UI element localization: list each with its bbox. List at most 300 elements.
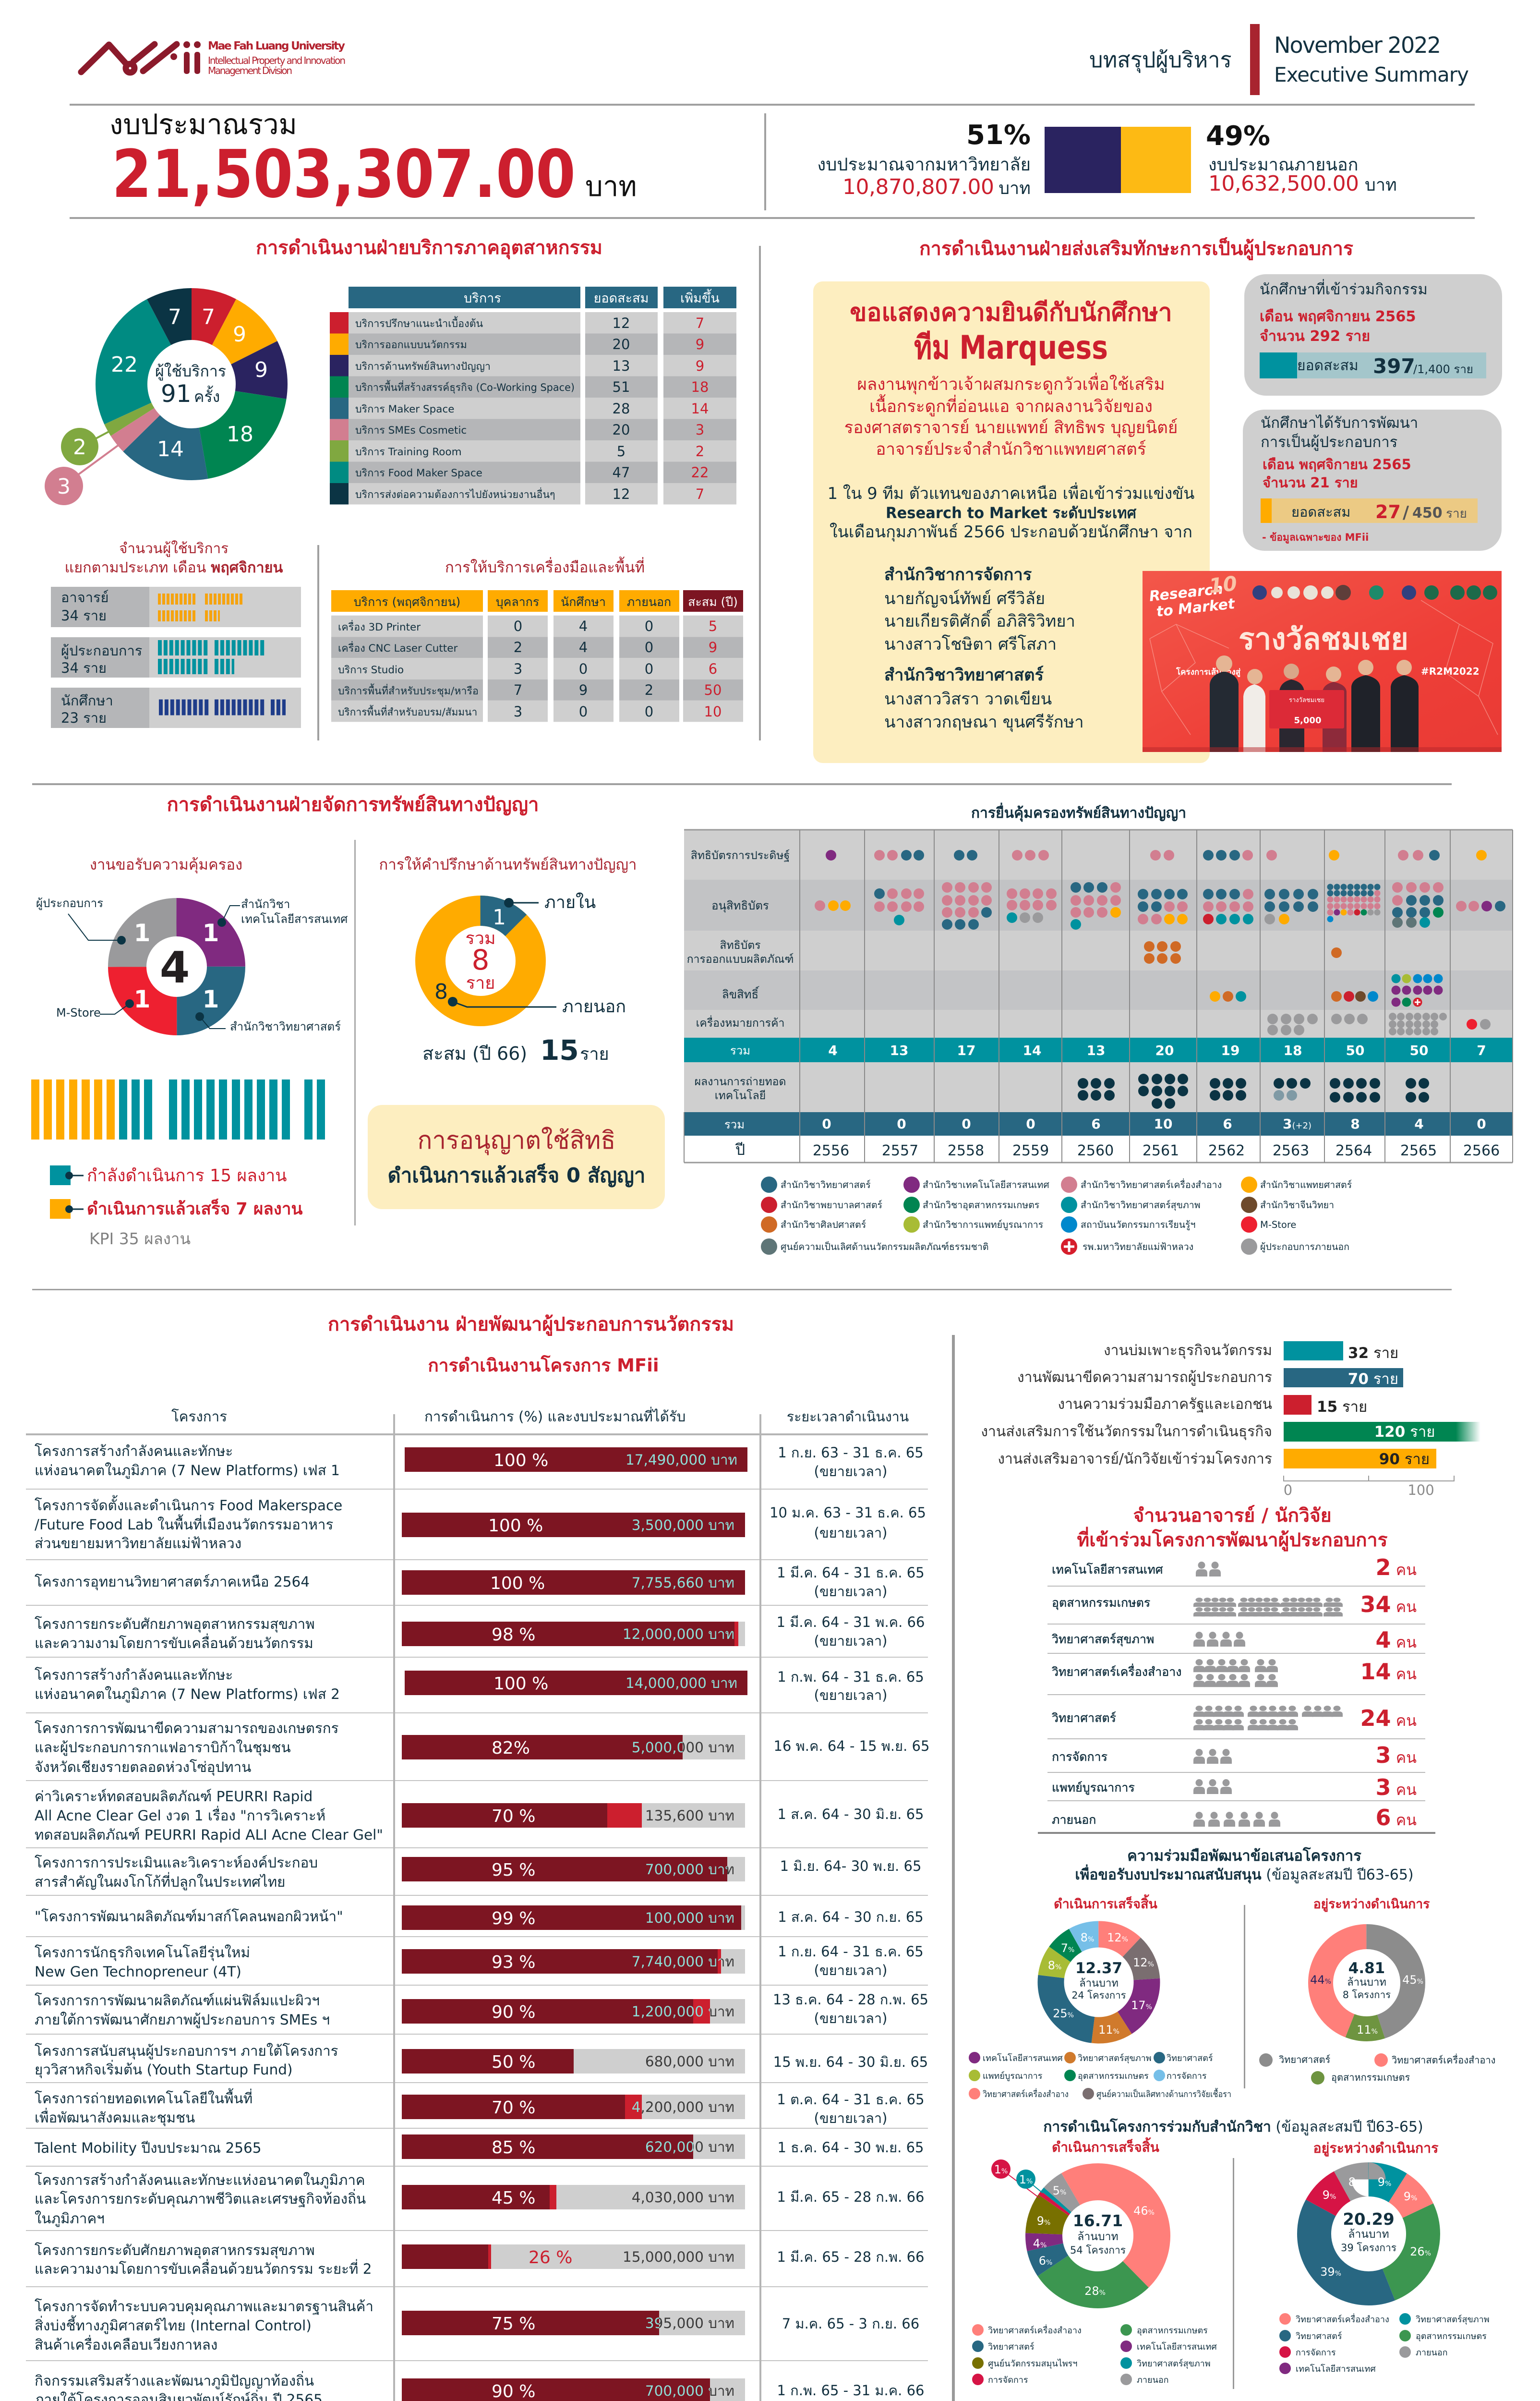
project row 7: ทดสอบผลิตภัณฑ์ PEURRI Rapid ALI Acne Clear Gel" xyxy=(35,1827,383,1843)
donut: proposals completed: 7% xyxy=(1061,1941,1074,1955)
stat card: students developed xyxy=(1243,410,1502,551)
donut: school projects in progress: เทคโนโลยีสารสนเทศ xyxy=(1296,2364,1376,2374)
project row 7 xyxy=(35,1788,924,1843)
logo: MFii: Mae Fah Luang University xyxy=(208,40,345,52)
donut: school projects completed xyxy=(972,2137,1217,2385)
stat card: student participants: ยอดสะสม xyxy=(1297,357,1359,374)
table: IP protection by year: 50 xyxy=(1346,1043,1364,1058)
project row 12: 15 พ.ย. 64 - 30 มิ.ย. 65 xyxy=(773,2054,928,2070)
table: IP protection by year: 19 xyxy=(1221,1043,1239,1058)
donut: proposals completed xyxy=(969,1894,1231,2099)
pictogram table: researchers: 4 คน xyxy=(1376,1627,1417,1653)
legend: IP owners: รพ.มหาวิทยาลัยแม่ฟ้าหลวง xyxy=(1083,1241,1193,1252)
table: IP protection by year: ปี xyxy=(735,1140,745,1159)
donut: proposals completed: 12% xyxy=(1133,1956,1154,1969)
project row 3: โครงการอุทยานวิทยาศาสตร์ภาคเหนือ 2564 xyxy=(35,1574,310,1590)
user counts by type: นักศึกษา xyxy=(61,692,113,709)
heading: entrepreneurship: การดำเนินงานฝ่ายส่งเสริมทักษะการเป็นผู้ประกอบการ xyxy=(919,237,1353,260)
photo: award ceremony: Research xyxy=(1148,581,1224,605)
donut: school projects in progress: 8% xyxy=(1348,2175,1362,2189)
project row 1: 1 ก.ย. 63 - 31 ธ.ค. 65 xyxy=(778,1444,924,1461)
project row 17 xyxy=(35,2298,919,2353)
legend: IP owners xyxy=(761,1176,1352,1255)
donut: proposals completed: 25% xyxy=(1053,2007,1074,2020)
donut: school projects completed: 4% xyxy=(1033,2237,1047,2250)
panel: congratulations team Marquess: นางสาววิสรา วาดเขียน xyxy=(884,690,1052,709)
donut: proposals in progress: 11% xyxy=(1357,2023,1378,2037)
pie chart: 91 services: 9 xyxy=(254,358,268,382)
project row 15: โครงการสร้างกำลังคนและทักษะแห่งอนาคตในภูมิภาค xyxy=(35,2172,365,2189)
project row 2: ส่วนขยายมหาวิทยาลัยแม่ฟ้าหลวง xyxy=(35,1535,241,1552)
legend: IP owners: สำนักวิชาการแพทย์บูรณาการ xyxy=(923,1219,1043,1231)
table: IP protection by year: ลิขสิทธิ์ xyxy=(722,986,759,1001)
donut: school projects completed: 54 โครงการ xyxy=(1070,2244,1126,2256)
chart: protection requests xyxy=(36,856,348,1033)
table: services: บริการออกแบบนวัตกรรม xyxy=(355,339,467,351)
project row 10 xyxy=(35,1943,924,1980)
chart: IP consulting: 15 xyxy=(540,1034,579,1067)
heading: industrial services: การดำเนินงานฝ่ายบริการภาคอุตสาหกรรม xyxy=(256,237,602,259)
table: services: บริการ Training Room xyxy=(355,446,462,458)
project row 18 xyxy=(35,2371,925,2401)
budget split bar: 51% xyxy=(966,120,1031,151)
pictogram table: researchers: 3 คน xyxy=(1376,1774,1417,1800)
chart: protection requests: สำนักวิชาวิทยาศาสตร์ xyxy=(230,1020,341,1033)
chart: protection requests: M-Store xyxy=(56,1006,101,1019)
legend: IP owners: สำนักวิชาแพทยศาสตร์ xyxy=(1260,1179,1352,1190)
photo: award ceremony: รางวัลชมเชย xyxy=(1289,697,1324,704)
stat card: students developed: การเป็นผู้ประกอบการ xyxy=(1261,433,1397,451)
heading: innovation entrepreneur dept: การดำเนินงาน ฝ่ายพัฒนาผู้ประกอบการนวัตกรรม xyxy=(328,1313,734,1336)
donut: school projects completed: การจัดการ xyxy=(988,2375,1028,2385)
bar chart: entrepreneur work: 0 xyxy=(1284,1482,1292,1498)
project row 4: 98 % xyxy=(492,1625,535,1645)
chart: IP consulting: 8 xyxy=(472,944,489,976)
donut: proposals in progress: อุตสาหกรรมเกษตร xyxy=(1331,2072,1410,2084)
table: equipment and space: 0 xyxy=(579,703,588,720)
table: services: บริการพื้นที่สร้างสรรค์ธุรกิจ (Co-Working Space) xyxy=(355,380,575,394)
user counts by type xyxy=(51,540,301,728)
project row 2: (ขยายเวลา) xyxy=(814,1525,887,1541)
project row 9 xyxy=(35,1905,924,1930)
table: services: บริการ xyxy=(464,291,501,306)
table: equipment and space: 2 xyxy=(645,682,653,698)
donut: school projects completed: วิทยาศาสตร์ xyxy=(988,2342,1035,2352)
table: services: 9 xyxy=(696,358,704,374)
table: equipment and space: บริการ Studio xyxy=(338,664,404,676)
stat card: student participants: /1,400 ราย xyxy=(1413,363,1473,376)
table: IP protection by year: 0 xyxy=(822,1116,831,1132)
stat card: students developed: 27 xyxy=(1375,501,1401,522)
table: IP protection by year: 10 xyxy=(1154,1116,1172,1132)
project row 17: 7 ม.ค. 65 - 3 ก.ย. 66 xyxy=(782,2316,919,2332)
table: IP protection by year: 14 xyxy=(1023,1043,1041,1058)
table: IP protection by year: 0 xyxy=(1026,1116,1035,1132)
table: services: ยอดสะสม xyxy=(594,291,649,306)
stat card: students developed: เดือน พฤศจิกายน 2565 xyxy=(1263,456,1411,473)
table: equipment and space: 0 xyxy=(645,661,653,677)
table: services: 51 xyxy=(613,379,630,395)
chart: protection requests: 1 xyxy=(203,919,219,947)
donut: proposals completed: เทคโนโลยีสารสนเทศ xyxy=(983,2053,1063,2063)
panel: congratulations team Marquess: นายกัญจน์ทัพย์ ศรีวิลัย xyxy=(884,589,1045,608)
icons: people xyxy=(1193,1562,1343,1827)
donut: school projects in progress: วิทยาศาสตร์ xyxy=(1296,2331,1342,2341)
project row 17: 395,000 บาท xyxy=(645,2315,734,2331)
table: services: บริการปรึกษาแนะนำเบื้องต้น xyxy=(355,316,483,330)
table: IP protection by year: รวม xyxy=(730,1044,750,1057)
project row 4: (ขยายเวลา) xyxy=(814,1633,887,1649)
donut: school projects completed: ล้านบาท xyxy=(1077,2231,1119,2243)
project row 10: 93 % xyxy=(492,1952,535,1972)
bars: works progress xyxy=(31,1079,325,1248)
project row 2: โครงการจัดตั้งและดำเนินการ Food Makerspace xyxy=(35,1495,342,1514)
pictogram table: researchers xyxy=(1038,1554,1435,1834)
table: IP protection by year: สิทธิบัตรการประดิษฐ์ xyxy=(691,849,790,862)
chart: protection requests: งานขอรับความคุ้มครอง xyxy=(90,856,242,874)
pictogram table: researchers: 3 คน xyxy=(1376,1742,1417,1768)
legend: IP owners: สำนักวิชาอุตสาหกรรมเกษตร xyxy=(923,1200,1039,1211)
donut: school projects completed: อุตสาหกรรมเกษตร xyxy=(1137,2326,1208,2336)
table: IP protection by year: 2563 xyxy=(1273,1142,1309,1159)
project row 5: โครงการสร้างกำลังคนและทักษะ xyxy=(35,1667,233,1683)
legend: IP owners: สำนักวิชาศิลปศาสตร์ xyxy=(781,1219,866,1230)
table: equipment and space: นักศึกษา xyxy=(561,595,606,609)
project row 5: 1 ก.พ. 64 - 31 ธ.ค. 65 xyxy=(777,1669,924,1685)
project row 9: 1 ส.ค. 64 - 30 ก.ย. 65 xyxy=(778,1909,924,1925)
project row 16: และความงามโดยการขับเคลื่อนด้วยนวัตกรรม ระยะที่ 2 xyxy=(35,2259,372,2277)
chart: IP consulting: 8 xyxy=(434,980,448,1004)
table: IP protection by year: 2558 xyxy=(948,1142,984,1159)
table: equipment and space: 0 xyxy=(645,639,653,655)
total budget: 21,503,307.00 xyxy=(112,136,576,213)
donut: school projects completed: 1% xyxy=(994,2163,1008,2176)
project row 14: 620,000 บาท xyxy=(645,2139,734,2155)
project row 13 xyxy=(35,2088,925,2126)
project row 11: 1,200,000 บาท xyxy=(632,2003,734,2020)
stat card: student participants: 397 xyxy=(1373,354,1415,378)
donut: proposals completed: 12% xyxy=(1107,1931,1128,1944)
table: IP protection by year: 13 xyxy=(1087,1043,1105,1058)
table: equipment and space: 4 xyxy=(579,618,588,634)
project row 17: สิ่งบ่งชี้ทางภูมิศาสตร์ไทย (Internal Control) xyxy=(35,2316,312,2334)
panel: congratulations team Marquess: รองศาสตราจารย์ นายแพทย์ สิทธิพร บุญยนิตย์ xyxy=(844,418,1178,437)
project row 6: 82% xyxy=(492,1738,530,1758)
chart: protection requests: ผู้ประกอบการ xyxy=(36,897,103,910)
project row 15: และโครงการยกระดับคุณภาพชีวิตและเศรษฐกิจท้องถิ่น xyxy=(35,2189,366,2207)
table: IP protection by year: การยื่นคุ้มครองทรัพย์สินทางปัญญา xyxy=(971,802,1186,822)
pictogram table: researchers: 34 คน xyxy=(1360,1591,1417,1617)
bar chart: entrepreneur work: 90 ราย xyxy=(1379,1451,1430,1468)
project row 16 xyxy=(35,2242,925,2277)
project row 13: (ขยายเวลา) xyxy=(814,2110,887,2126)
budget split bar: บาท xyxy=(1365,175,1397,195)
photo: award ceremony: 5,000 xyxy=(1294,715,1321,726)
table: services: บริการส่งต่อความต้องการไปยังหน่วยงานอื่นๆ xyxy=(355,487,555,501)
dots: technology transfer xyxy=(1078,1074,1429,1109)
legend: IP owners: สำนักวิชาวิทยาศาสตร์ xyxy=(781,1179,871,1190)
table: IP protection by year: 2566 xyxy=(1463,1142,1500,1159)
dots: design patents xyxy=(1144,941,1342,964)
project row 18: 700,000 บาท xyxy=(645,2383,734,2399)
panel: congratulations team Marquess: 1 ใน 9 ทีม ตัวแทนของภาคเหนือ เพื่อเข้าร่วมแข่งขัน xyxy=(828,482,1194,503)
donut: school projects in progress: 9% xyxy=(1378,2175,1391,2189)
photo: award ceremony: 10 xyxy=(1208,571,1238,598)
chart: protection requests: 1 xyxy=(203,985,219,1013)
project row 8: โครงการการประเมินและวิเคราะห์องค์ประกอบ xyxy=(35,1855,318,1871)
table: IP protection by year: 13 xyxy=(890,1043,908,1058)
project row 11: ภายใต้การพัฒนาศักยภาพผู้ประกอบการ SMEs ฯ xyxy=(35,2012,330,2028)
table: equipment and space xyxy=(331,557,743,720)
user counts by type: ผู้ประกอบการ xyxy=(61,643,142,659)
pictogram table: researchers: ภายนอก xyxy=(1052,1813,1096,1827)
donut: school projects completed: 46% xyxy=(1133,2204,1155,2218)
donut: school projects completed: 5% xyxy=(1053,2184,1066,2197)
dots: copyrights xyxy=(1210,974,1443,1006)
project row 7: All Acne Clear Gel งวด 1 เรื่อง "การวิเคราะห์ xyxy=(35,1806,325,1824)
project row 8: 700,000 บาท xyxy=(645,1861,734,1878)
donut: proposals completed: 8% xyxy=(1081,1931,1094,1944)
bar chart: entrepreneur work: 32 ราย xyxy=(1348,1345,1398,1362)
legend: IP owners: สถาบันนวัตกรรมการเรียนรู้ฯ xyxy=(1081,1219,1195,1231)
donut: school projects completed: 16.71 xyxy=(1073,2211,1123,2230)
photo: award ceremony: โครงการเส้นทางสู่ xyxy=(1176,667,1241,678)
project row 3: 1 มี.ค. 64 - 31 ธ.ค. 65 xyxy=(777,1564,925,1581)
project row 10: 1 ก.ย. 64 - 31 ธ.ค. 65 xyxy=(778,1943,924,1960)
panel: congratulations team Marquess: ทีม Marquess xyxy=(914,329,1108,367)
user counts by type: 34 ราย xyxy=(61,607,107,624)
project row 6 xyxy=(35,1720,929,1776)
pictogram table: researchers: 24 คน xyxy=(1360,1705,1417,1731)
project row 1: 17,490,000 บาท xyxy=(626,1452,737,1468)
panel: congratulations team Marquess: อาจารย์ประจำสำนักวิชาแพทยศาสตร์ xyxy=(876,440,1146,459)
project row 8: 95 % xyxy=(492,1860,535,1880)
legend: IP owners: สำนักวิชาวิทยาศาสตร์เครื่องสำอาง xyxy=(1081,1178,1222,1190)
heading: researchers xyxy=(1077,1504,1387,1552)
panel: congratulations team Marquess: นายเกียรติศักดิ์ อภิสิริวิทยา xyxy=(884,609,1075,631)
project row 17: 75 % xyxy=(492,2314,535,2334)
project row 3: 100 % xyxy=(490,1574,545,1593)
legend: IP owners: ศูนย์ความเป็นเลิศด้านนวัตกรรมผลิตภัณฑ์ธรรมชาติ xyxy=(781,1241,989,1253)
chart: IP consulting: 1 xyxy=(493,905,506,930)
table: equipment and space: 50 xyxy=(704,682,722,698)
stat card: students developed: นักศึกษาได้รับการพัฒนา xyxy=(1261,414,1418,432)
table: equipment and space: เครื่อง 3D Printer xyxy=(338,620,421,633)
stat card: student participants xyxy=(1244,274,1502,396)
table: IP protection by year: 2565 xyxy=(1400,1142,1437,1159)
bar chart: entrepreneur work xyxy=(981,1341,1480,1498)
legend: IP owners: ผู้ประกอบการภายนอก xyxy=(1260,1241,1349,1253)
header: executive summary: บทสรุปผู้บริหาร xyxy=(1089,47,1232,73)
pie chart: 91 services xyxy=(45,305,268,505)
project row 1: 100 % xyxy=(493,1451,548,1470)
budget split bar: 10,870,807.00 xyxy=(842,175,994,199)
panel: congratulations team Marquess: เนื้อกระดูกที่อ่อนแอ จากผลงานวิจัยของ xyxy=(869,394,1153,416)
table: equipment and space: เครื่อง CNC Laser Cutter xyxy=(338,641,457,655)
stat card: student participants: จำนวน 292 ราย xyxy=(1260,328,1370,345)
donut: school projects in progress: วิทยาศาสตร์เครื่องสำอาง xyxy=(1296,2313,1389,2325)
logo: MFii xyxy=(81,40,346,76)
dots: petty patents xyxy=(815,882,1505,930)
chart: IP consulting: การให้คำปรึกษาด้านทรัพย์สินทางปัญญา xyxy=(379,856,637,873)
donut: proposals completed: การจัดการ xyxy=(1167,2071,1207,2081)
project row 17: สินค้าเครื่องเคลือบเวียงกาหลง xyxy=(35,2335,217,2353)
table: services: 9 xyxy=(696,336,704,352)
heading: IP management: การดำเนินงานฝ่ายจัดการทรัพย์สินทางปัญญา xyxy=(167,794,539,816)
project row 13: 1 ต.ค. 64 - 31 ธ.ค. 65 xyxy=(777,2091,925,2108)
project row 2: 100 % xyxy=(488,1516,543,1536)
table: IP protection by year: 0 xyxy=(1477,1116,1486,1132)
donut: proposals completed: วิทยาศาสตร์สุขภาพ xyxy=(1078,2053,1152,2063)
panel: congratulations team Marquess: ในเดือนกุมภาพันธ์ 2566 ประกอบด้วยนักศึกษา จาก xyxy=(830,522,1192,542)
donut: school projects in progress: 20.29 xyxy=(1343,2210,1395,2229)
project row 15: ในภูมิภาคฯ xyxy=(35,2210,105,2227)
donut: school projects completed: 9% xyxy=(1037,2214,1050,2228)
chart: protection requests: เทคโนโลยีสารสนเทศ xyxy=(241,912,348,926)
bars: works progress: กำลังดำเนินการ 15 ผลงาน xyxy=(87,1166,287,1186)
project row 6: จังหวัดเชียงรายตลอดห่วงโซ่อุปทาน xyxy=(35,1759,251,1776)
project row 1: (ขยายเวลา) xyxy=(814,1463,887,1479)
panel: licensing: การอนุญาตใช้สิทธิ xyxy=(417,1127,616,1155)
table: IP protection by year: 2560 xyxy=(1077,1142,1114,1159)
project row 18: 1 ก.พ. 65 - 31 ม.ค. 66 xyxy=(777,2382,925,2399)
budget split bar: 49% xyxy=(1206,121,1270,152)
donut: school projects in progress: 9% xyxy=(1323,2188,1336,2202)
project row 11: โครงการการพัฒนาผลิตภัณฑ์แผ่นฟิล์มแปะผิวฯ xyxy=(35,1992,320,2009)
table: IP protection by year: 7 xyxy=(1477,1043,1486,1058)
project row 10: New Gen Technopreneur (4T) xyxy=(35,1964,241,1980)
total budget: งบประมาณรวม xyxy=(109,108,297,141)
project row 14: Talent Mobility ปีงบประมาณ 2565 xyxy=(34,2140,262,2156)
table: services: 7 xyxy=(696,486,704,502)
table: IP protection by year: 4 xyxy=(828,1043,838,1058)
project row 6: 5,000,000 บาท xyxy=(632,1739,734,1756)
pie chart: 91 services: 14 xyxy=(157,437,184,461)
project row 16: 15,000,000 บาท xyxy=(623,2249,734,2265)
panel: congratulations team Marquess: ขอแสดงความยินดีกับนักศึกษา xyxy=(850,298,1172,327)
panel: congratulations team Marquess: ผลงานพุกข้าวเจ้าผสมกระดูกวัวเพื่อใช้เสริม xyxy=(857,373,1165,394)
project row 2: /Future Food Lab ในพื้นที่เมืองนวัตกรรมอาหาร xyxy=(35,1515,333,1533)
table: services: 12 xyxy=(613,486,630,502)
table: services: 12 xyxy=(613,315,630,331)
pie chart: 91 services: ครั้ง xyxy=(194,386,220,406)
table: IP protection by year: การออกแบบผลิตภัณฑ์ xyxy=(687,953,794,966)
header: executive summary xyxy=(1089,24,1469,95)
chart: IP consulting xyxy=(379,856,637,1067)
donut: proposals in progress: 44% xyxy=(1310,1973,1331,1987)
table: IP protection by year xyxy=(684,802,1513,1163)
pictogram table: researchers: 2 คน xyxy=(1376,1554,1417,1580)
project row 1: โครงการสร้างกำลังคนและทักษะ xyxy=(35,1443,233,1459)
donut: school projects completed: 1% xyxy=(1019,2173,1033,2186)
project row 1 xyxy=(35,1443,924,1479)
pictogram table: researchers: วิทยาศาสตร์เครื่องสำอาง xyxy=(1052,1663,1182,1679)
chart: protection requests: 1 xyxy=(134,919,150,947)
table: IP protection by year: 4 xyxy=(1414,1116,1424,1132)
project row 2 xyxy=(35,1495,926,1552)
table: IP protection by year: สิทธิบัตร xyxy=(720,939,761,952)
table: equipment and space: 0 xyxy=(645,618,653,634)
pie chart: 91 services: 7 xyxy=(202,305,215,329)
project row 3: (ขยายเวลา) xyxy=(814,1583,887,1600)
legend: IP owners: สำนักวิชาเทคโนโลยีสารสนเทศ xyxy=(923,1179,1049,1190)
table: equipment and space: 3 xyxy=(514,703,522,720)
table: services: 14 xyxy=(691,400,709,417)
panel: congratulations team Marquess: สำนักวิชาวิทยาศาสตร์ xyxy=(884,666,1044,685)
legend: IP owners: สำนักวิชาจีนวิทยา xyxy=(1260,1200,1334,1211)
photo: award ceremony xyxy=(1143,571,1502,752)
donut: proposals completed: ศูนย์ความเป็นเลิศทางด้านการวิจัยเชื้อรา xyxy=(1096,2088,1231,2099)
heading: collaboration proposals: เพื่อขอรับงบประมาณสนับสนุน (ข้อมูลสะสมปี ปี63-65) xyxy=(1075,1864,1414,1884)
donut: school projects completed: วิทยาศาสตร์เครื่องสำอาง xyxy=(988,2324,1082,2336)
table: IP protection by year: 6 xyxy=(1091,1116,1101,1132)
total budget: บาท xyxy=(585,170,637,203)
project row 6: 16 พ.ค. 64 - 15 พ.ย. 65 xyxy=(774,1738,929,1754)
photo: award ceremony: #R2M2022 xyxy=(1421,666,1480,677)
table: IP protection by year: 6 xyxy=(1223,1116,1232,1132)
table: MFii projects: การดำเนินการ (%) และงบประมาณที่ได้รับ xyxy=(424,1407,686,1425)
project row 12: 680,000 บาท xyxy=(645,2053,734,2070)
heading: collaboration proposals: ความร่วมมือพัฒนาข้อเสนอโครงการ xyxy=(1127,1847,1361,1865)
chart: IP consulting: รวม xyxy=(465,929,496,948)
donut: proposals completed: อุตสาหกรรมเกษตร xyxy=(1078,2071,1149,2081)
donut: school projects completed: ศูนย์นวัตกรรมสมุนไพรฯ xyxy=(988,2358,1077,2369)
project row 14: 85 % xyxy=(492,2138,535,2158)
table: IP protection by year: 2562 xyxy=(1208,1142,1245,1159)
project row 4: และความงามโดยการขับเคลื่อนด้วยนวัตกรรม xyxy=(35,1633,313,1651)
table: equipment and space: ภายนอก xyxy=(627,595,671,609)
pie chart: 91 services: 9 xyxy=(233,322,246,347)
budget split bar: งบประมาณภายนอก xyxy=(1208,155,1358,175)
table: equipment and space: 0 xyxy=(645,703,653,720)
project row 11 xyxy=(35,1991,928,2028)
user counts by type: 34 ราย xyxy=(61,660,107,676)
stat card: students developed: ยอดสะสม xyxy=(1291,504,1350,520)
project row 12 xyxy=(35,2043,928,2078)
table: services: บริการ Maker Space xyxy=(355,403,454,415)
project row 4: โครงการยกระดับศักยภาพอุตสาหกรรมสุขภาพ xyxy=(35,1616,315,1633)
project row 12: ยุววิสาหกิจเริ่มต้น (Youth Startup Fund) xyxy=(35,2060,293,2078)
user counts by type: จำนวนผู้ใช้บริการ xyxy=(119,540,229,557)
bars: works progress: KPI 35 ผลงาน xyxy=(89,1229,191,1248)
table: services: 20 xyxy=(613,336,630,352)
table: IP protection by year: 0 xyxy=(962,1116,971,1132)
table: IP protection by year: 18 xyxy=(1284,1043,1302,1058)
table: IP protection by year: 2564 xyxy=(1335,1142,1372,1159)
project row 12: โครงการสนับสนุนผู้ประกอบการฯ ภายใต้โครงการ xyxy=(35,2043,338,2060)
donut: proposals completed: 17% xyxy=(1131,1999,1152,2012)
pie chart: 91 services: 22 xyxy=(111,352,138,377)
bar chart: entrepreneur work: งานบ่มเพาะธุรกิจนวัตกรรม xyxy=(1104,1342,1272,1359)
table: services xyxy=(330,287,736,504)
donut: proposals completed: 11% xyxy=(1098,2023,1119,2037)
photo: award ceremony: to Market xyxy=(1155,595,1236,620)
heading: MFii projects: การดำเนินงานโครงการ MFii xyxy=(428,1355,659,1376)
stat card: students developed: ราย xyxy=(1446,507,1467,521)
donut: proposals completed: 12.37 xyxy=(1075,1960,1122,1977)
table: equipment and space: 5 xyxy=(709,618,717,634)
project row 3: 7,755,660 บาท xyxy=(632,1575,734,1591)
panel: licensing xyxy=(368,1105,665,1209)
pictogram table: researchers: วิทยาศาสตร์สุขภาพ xyxy=(1052,1632,1154,1647)
project row 10: (ขยายเวลา) xyxy=(814,1962,887,1978)
project row 17: โครงการจัดทำระบบควบคุมคุณภาพและมาตรฐานสินค้า xyxy=(35,2298,373,2315)
donut: school projects in progress: 9% xyxy=(1404,2190,1417,2203)
table: services: 22 xyxy=(691,464,709,481)
donut: school projects completed: ดำเนินการเสร็จสิ้น xyxy=(1052,2137,1159,2155)
heading: projects with schools: การดำเนินโครงการร่วมกับสำนักวิชา (ข้อมูลสะสมปี ปี63-65) xyxy=(1043,2118,1423,2135)
donut: school projects in progress: อยู่ระหว่างดำเนินการ xyxy=(1313,2140,1439,2157)
